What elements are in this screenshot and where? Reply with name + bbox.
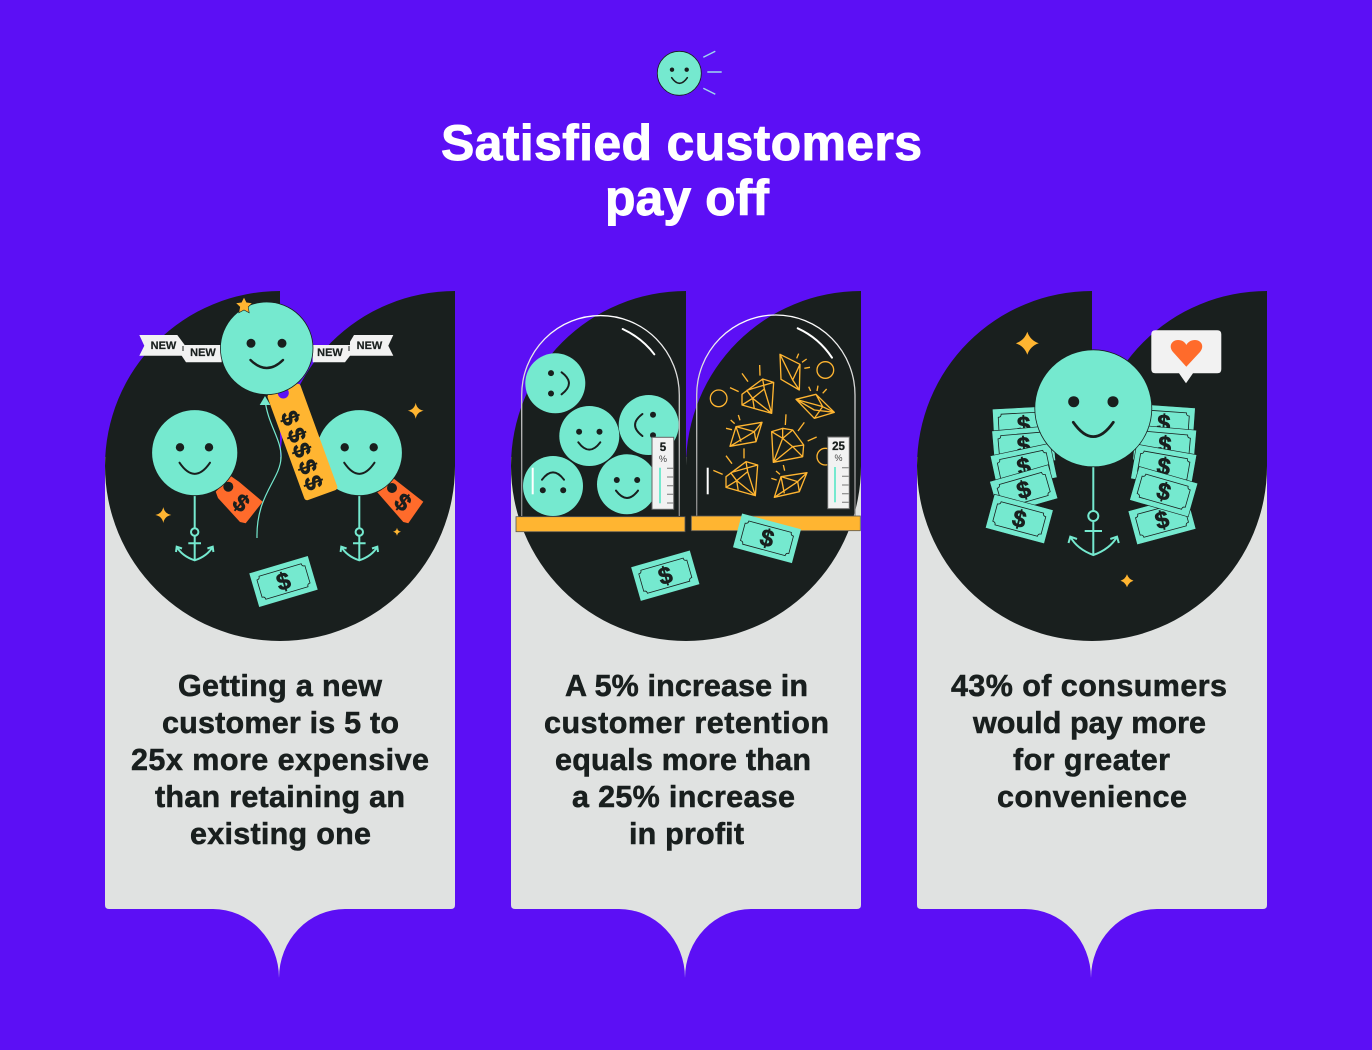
orange tag left [216, 476, 263, 523]
dark illustration backdrop [511, 291, 861, 641]
stack of bills right: $ [1156, 410, 1172, 438]
orange tag left: $ [227, 489, 255, 518]
text: new customer statement: 25x more expensive [131, 743, 429, 777]
thermometer 25 percent: 25 [832, 441, 845, 453]
stack of bills left: $ [1009, 505, 1030, 534]
glass dome left [522, 316, 679, 516]
text: new customer statement: than retaining an [155, 780, 405, 814]
text: retention statement: in profit [629, 817, 744, 851]
title: pay off [605, 170, 769, 226]
stack of bills right [1128, 404, 1198, 545]
text: convenience statement: for greater [1013, 743, 1170, 777]
shelf right [691, 516, 860, 531]
text: new customer statement: customer is 5 to [162, 706, 399, 740]
text: new customer statement: existing one [190, 817, 371, 851]
stack of bills right: $ [1152, 506, 1173, 535]
stack of bills left: $ [1016, 412, 1032, 439]
big face with anchor [1035, 350, 1152, 555]
left face with anchor [152, 410, 238, 560]
dark illustration backdrop [917, 291, 1267, 641]
price tag with dollars [267, 383, 338, 501]
price tag with dollars: $ [275, 407, 305, 430]
card background [105, 457, 455, 978]
price tag with dollars: $ [298, 472, 328, 494]
new ribbons [139, 335, 393, 362]
text: convenience statement [951, 669, 1227, 814]
faces in jar [523, 353, 679, 516]
card background [917, 457, 1267, 978]
dollar bill on shelf [733, 514, 801, 563]
diamonds [710, 354, 834, 497]
text: retention statement: a 25% increase [572, 780, 795, 814]
dark illustration backdrop [105, 291, 455, 641]
thermometer 25 percent [828, 437, 849, 509]
new ribbons: NEW [357, 340, 383, 352]
new ribbons: NEW [317, 347, 343, 359]
dollar bill: $ [273, 567, 294, 597]
thermometer 5 percent: % [659, 454, 667, 464]
speech bubble with heart [1151, 330, 1221, 383]
text: convenience statement: convenience [997, 780, 1187, 814]
stack of bills right: $ [1157, 431, 1173, 460]
stack of bills left: $ [1016, 432, 1032, 460]
icon: smiling face with rays [657, 51, 722, 95]
price tag with dollars: $ [286, 439, 316, 462]
panel: new customer cost [105, 291, 455, 978]
shelf left [516, 517, 685, 532]
price tag with dollars: $ [281, 424, 311, 447]
text: retention statement [544, 669, 829, 851]
text: new customer statement [131, 669, 429, 851]
orange tag right: $ [389, 488, 417, 518]
text: new customer statement: Getting a new [178, 669, 382, 703]
panel: convenience [917, 291, 1267, 978]
balloon face with star [220, 297, 313, 538]
stack of bills left: $ [1014, 475, 1035, 505]
price tag with dollars: $ [292, 456, 322, 478]
sparkles [1016, 332, 1134, 587]
new ribbons: NEW [190, 347, 216, 359]
right face with anchor [316, 410, 402, 560]
dollar bill lower [631, 550, 699, 601]
text: retention statement: equals more than [555, 743, 811, 777]
card background [511, 457, 861, 978]
thermometer 25 percent: % [834, 453, 843, 463]
stack of bills left: $ [1014, 452, 1034, 482]
text: convenience statement: 43% of consumers [951, 669, 1227, 703]
panel: retention and profit [511, 291, 861, 978]
dollar bill lower: $ [655, 561, 676, 591]
stack of bills left [985, 406, 1058, 544]
title [441, 115, 922, 226]
new ribbons: NEW [151, 340, 177, 352]
orange tag right [377, 478, 423, 523]
stack of bills right: $ [1155, 453, 1173, 482]
text: convenience statement: would pay more [972, 706, 1206, 740]
stack of bills right: $ [1153, 477, 1174, 507]
title: Satisfied customers [441, 115, 922, 171]
thermometer 5 percent [652, 437, 674, 509]
dollar bill [249, 556, 318, 607]
sparkles [155, 403, 424, 536]
text: retention statement: A 5% increase in [565, 669, 808, 703]
text: retention statement: customer retention [544, 706, 829, 740]
thermometer 5 percent: 5 [660, 442, 667, 454]
dollar bill on shelf: $ [757, 524, 777, 554]
glass dome right [697, 315, 855, 516]
